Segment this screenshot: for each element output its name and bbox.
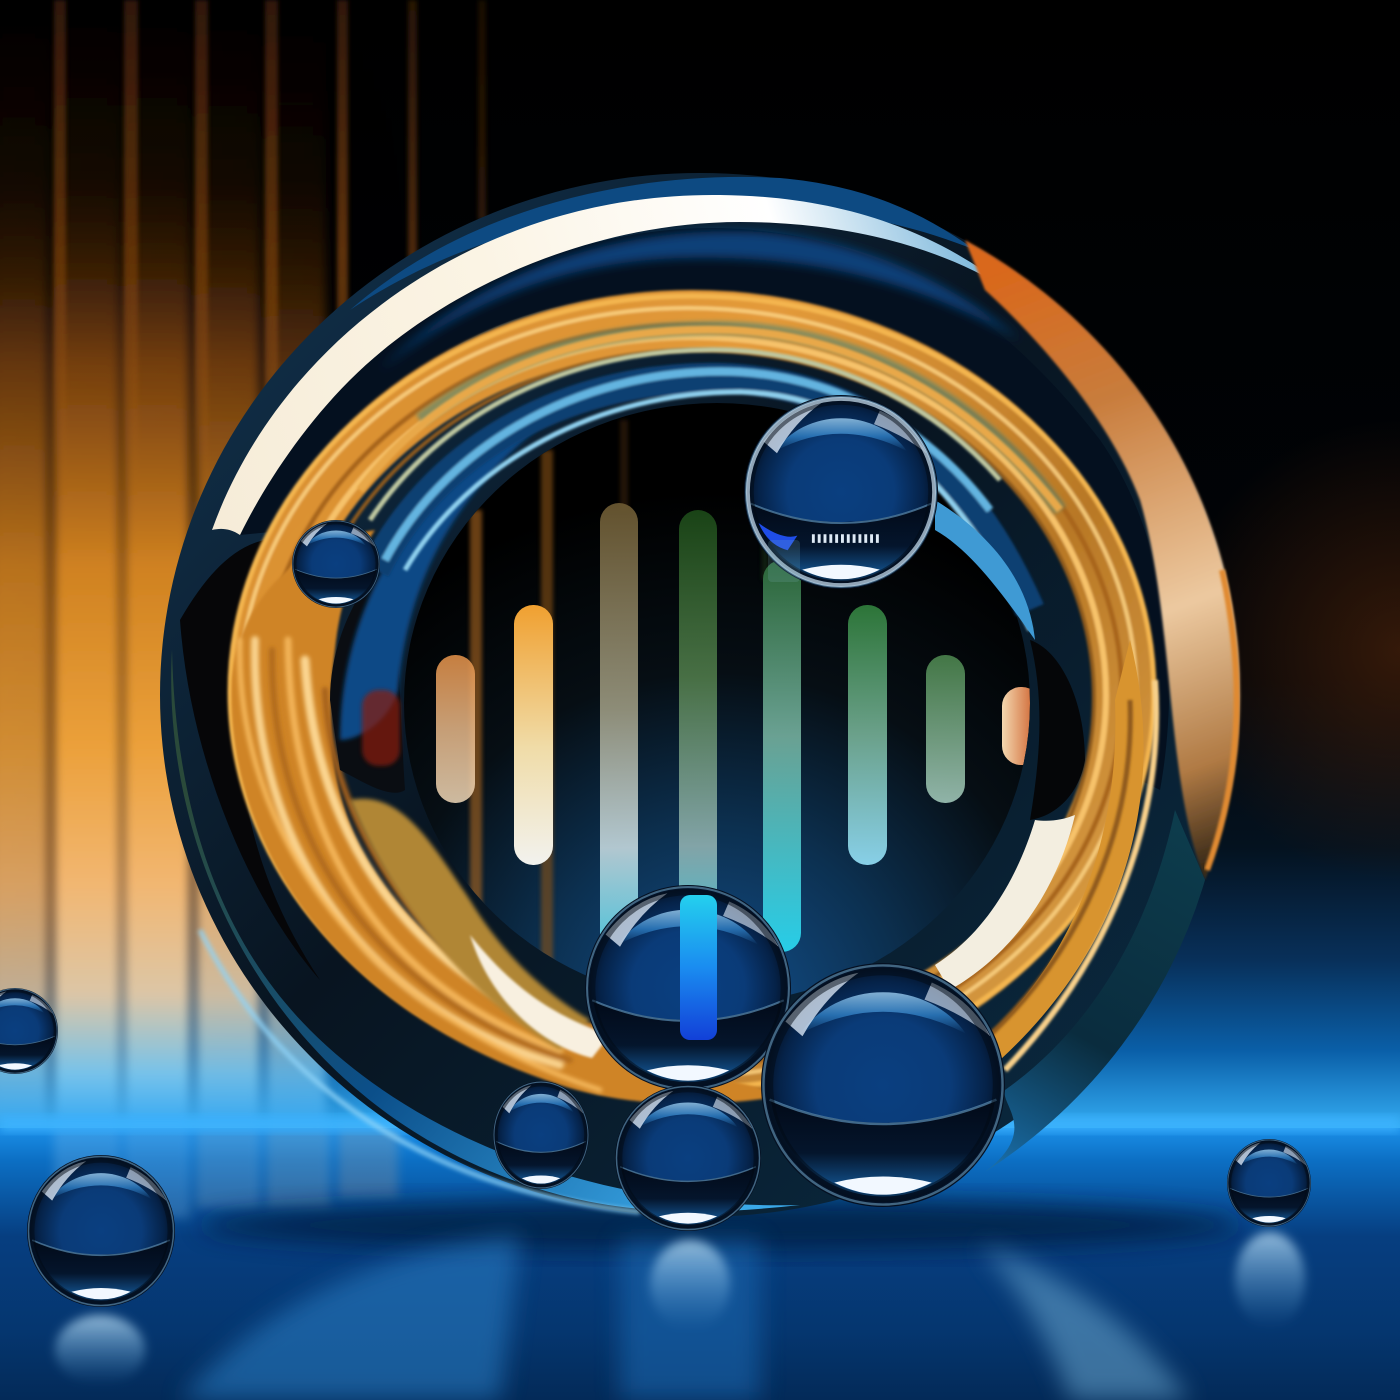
- ring black dark patch left: [180, 538, 320, 980]
- gold band: main: [230, 296, 1154, 1088]
- ring lower-left outer rim: [171, 650, 800, 1211]
- equalizer bar 8: [1002, 687, 1030, 765]
- sphere: small left of center: [493, 1081, 589, 1189]
- ring lower-right teal band: [985, 810, 1205, 1172]
- sphere: floor left: [27, 1155, 175, 1307]
- ring teal lines above swirl: [420, 328, 1060, 510]
- ring dark patch near inner left: [330, 560, 405, 793]
- sphere scribble reflection: [812, 534, 880, 543]
- ring dark blue sheen: [380, 231, 1020, 370]
- sphere: center large: [585, 885, 791, 1091]
- sphere: upper right large: [744, 395, 938, 589]
- inner panel: thin stripes and equalizer bars: [436, 420, 1041, 990]
- ring lower-right gold lines: [990, 680, 1156, 1070]
- sphere glass rim: [748, 399, 934, 585]
- background: warm glow at right: [1150, 350, 1400, 970]
- sphere: floor right: [1227, 1139, 1311, 1227]
- red reflection at left of hole: [362, 690, 400, 766]
- ring top blue rim: [350, 177, 975, 310]
- ring orange and cream right band: [965, 240, 1240, 880]
- background: vertical orange light stripes: [0, 0, 326, 1130]
- equalizer bar 5: [763, 560, 801, 952]
- floor: reflective blue surface: [0, 1128, 1400, 1400]
- ring bright blue edge: [200, 930, 640, 1212]
- ring olive inner lower left: [350, 799, 590, 1050]
- equalizer bar 3: [600, 503, 638, 963]
- equalizer bar 6: [848, 605, 887, 865]
- horizon: glowing line: [0, 1116, 1400, 1132]
- sphere logo reflection: [759, 523, 797, 550]
- hole background: [404, 403, 1030, 1003]
- ring white highlight: [212, 195, 1012, 535]
- bar seen through center sphere: [680, 895, 717, 1040]
- thin stripes inside the hole: [470, 420, 768, 990]
- ring swirl tail at right: [935, 500, 1035, 640]
- equalizer bar 7: [926, 655, 965, 803]
- ring: glass body: [160, 173, 1240, 1217]
- equalizer bar 2: [514, 605, 553, 865]
- ring base: [160, 173, 1240, 1217]
- background: left warm wash: [0, 315, 335, 1105]
- gold band: concentric lines: [230, 296, 1154, 1088]
- ring dark band: [240, 228, 1169, 790]
- sphere: left edge: [0, 988, 58, 1074]
- floor: ring reflection: [180, 1235, 1190, 1400]
- gold band: thick lower-left fill: [232, 530, 790, 1104]
- sphere: upper left small: [292, 520, 380, 608]
- ring blue swirl: [360, 330, 1060, 630]
- bar seen through upper right sphere: [768, 540, 800, 582]
- sphere: center bottom: [615, 1085, 761, 1231]
- floor: sphere reflections: [55, 1232, 1305, 1385]
- gold band: lower-left lines: [240, 640, 600, 1090]
- ring dark inner right: [1030, 640, 1085, 820]
- background: thin stripes reaching the top: [54, 0, 486, 500]
- equalizer bar 4: [679, 510, 717, 890]
- ring right thin gold edge: [1207, 570, 1237, 870]
- equalizer bar 1: [436, 655, 475, 803]
- ring white inner lower-left edge: [470, 935, 610, 1058]
- sphere: large right: [761, 963, 1005, 1207]
- ring cream inner lower-right highlight: [935, 815, 1075, 990]
- ring blue swirl left sweep: [340, 410, 560, 740]
- floor: dark ring shadow: [200, 1199, 1240, 1251]
- floor: stripe reflections: [54, 1128, 398, 1218]
- ring lower-right gold: [985, 640, 1144, 1060]
